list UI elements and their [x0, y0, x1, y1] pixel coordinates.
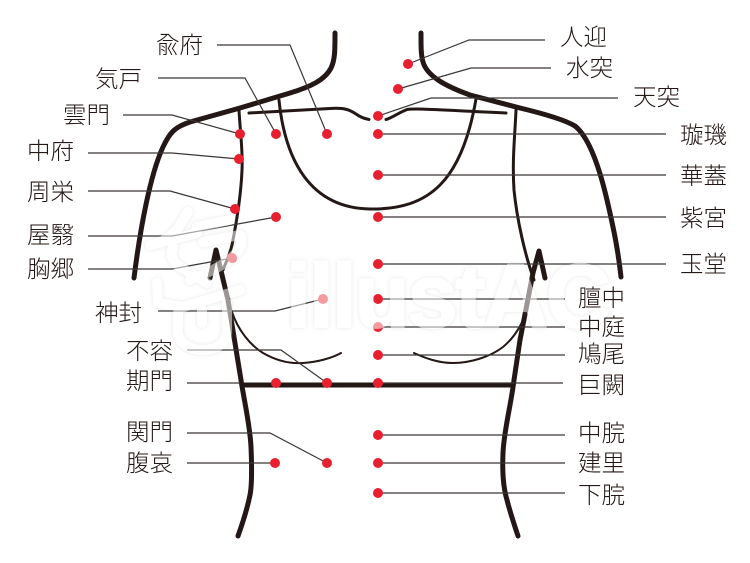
labels: right column: 建里	[578, 450, 625, 476]
labels: right column: 璇璣	[680, 122, 727, 148]
labels: right column: 華蓋	[680, 163, 727, 189]
labels: right column: 人迎	[560, 24, 607, 50]
labels: left column: 関門	[126, 419, 173, 445]
leader lines	[88, 40, 666, 493]
labels: right column: 下脘	[578, 482, 625, 508]
labels: right column: 膻中	[578, 285, 625, 311]
labels: right column: 中脘	[578, 420, 625, 446]
labels: left column: 中府	[27, 138, 74, 164]
watermark	[150, 212, 611, 350]
labels: left column: 周栄	[27, 179, 74, 205]
labels: left column: 兪府	[156, 32, 203, 58]
body outline illustration	[134, 33, 621, 536]
labels: right column: 鳩尾	[578, 341, 625, 367]
labels: left column: 屋翳	[27, 222, 74, 248]
labels: left column: 神封	[95, 300, 142, 326]
watermark: illustAC	[286, 247, 611, 347]
labels: left column: 不容	[126, 338, 173, 364]
labels: left column: 雲門	[63, 102, 110, 128]
labels: right column: 紫宮	[680, 205, 727, 231]
labels: left column: 気戸	[95, 66, 142, 92]
acupoint dots	[227, 59, 413, 498]
labels: right column: 天突	[633, 84, 680, 110]
labels: right column: 水突	[566, 55, 613, 81]
labels: right column: 中庭	[578, 314, 625, 340]
labels: left column: 期門	[126, 368, 173, 394]
labels: left column	[27, 32, 203, 476]
labels: left column: 胸郷	[27, 256, 74, 282]
labels: right column: 玉堂	[680, 251, 727, 277]
labels: right column	[560, 24, 727, 508]
labels: left column: 腹哀	[126, 450, 173, 476]
labels: right column: 巨闕	[578, 372, 625, 398]
